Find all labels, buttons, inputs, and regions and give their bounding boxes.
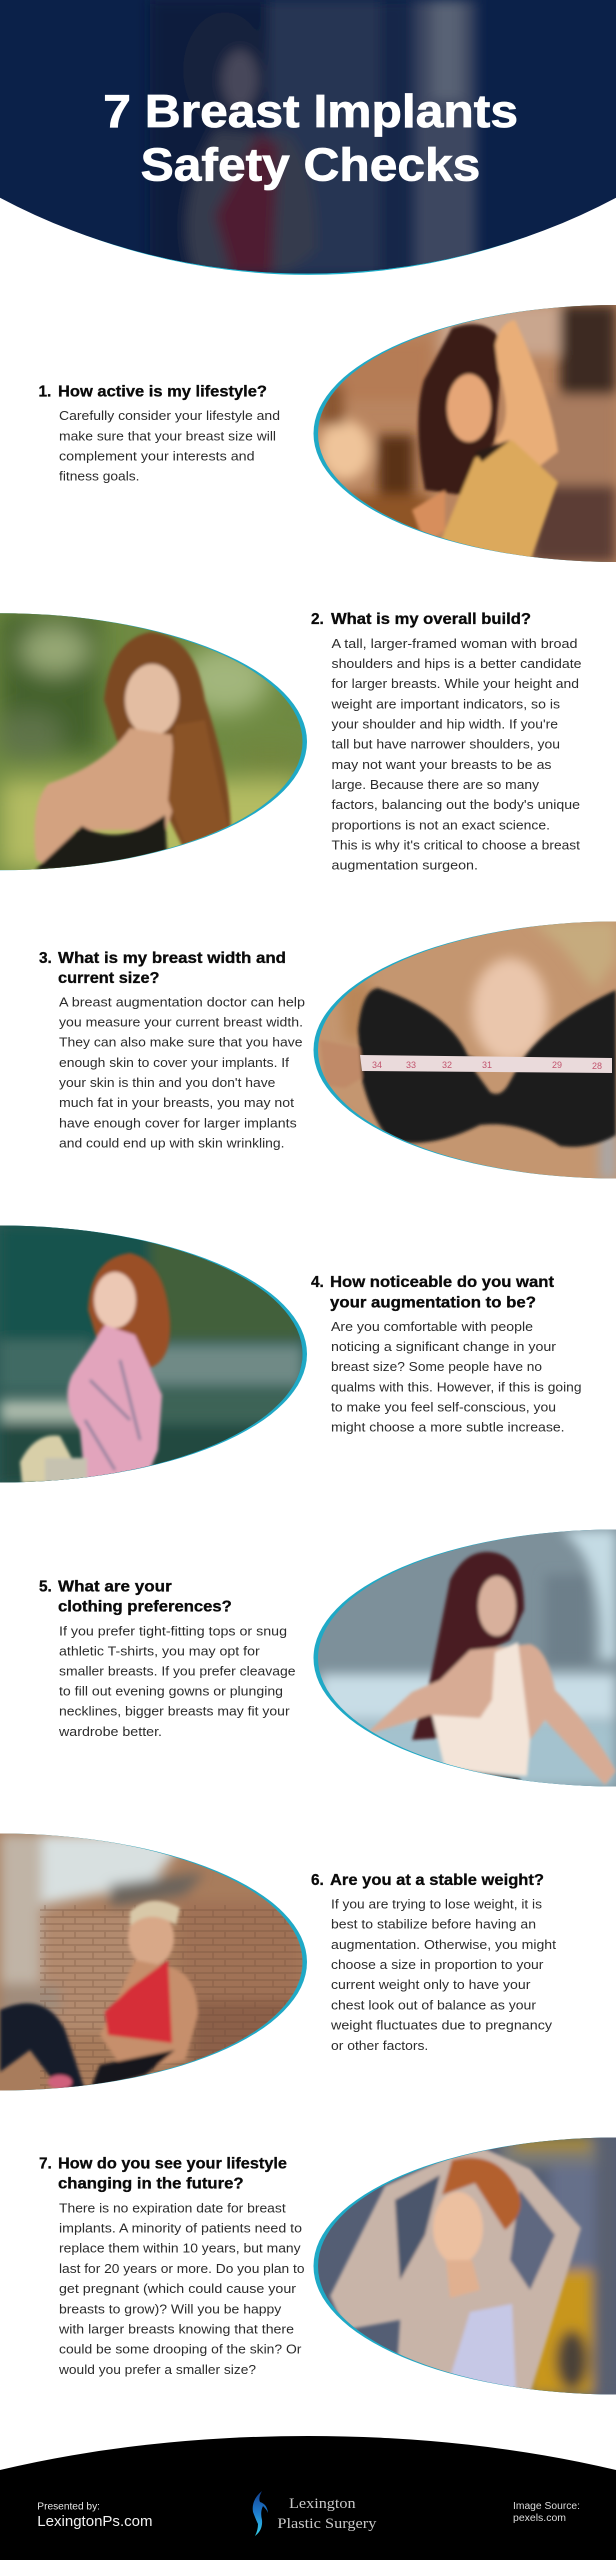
text: lifestyle changing: could be some drooping of the skin? Or [59,2342,302,2357]
teal header edge [0,0,616,275]
photo: woman against a brick wall [0,1833,307,2091]
text: lifestyle changing: would you prefer a smaller size? [58,2362,256,2377]
text: lifestyle changing [39,2156,304,2377]
text: breast width: much fat in your breasts, you may not [59,1095,294,1110]
text: overall build: factors, balancing out the body's unique [332,797,580,812]
section 6 [0,1833,556,2091]
text: stable weight: 6. [311,1872,324,1889]
title: 7 Breast Implants [103,85,518,137]
text: clothing preferences: What are your [58,1578,172,1596]
text: overall build: tall but have narrower shoulders, you [332,737,560,752]
text: lifestyle changing: changing in the future? [58,2176,244,2193]
text: overall build: large. Because there are so many [332,777,539,792]
measuring tape: 32 [442,1060,452,1070]
text: how active [38,384,280,484]
section 4 [0,1225,582,1483]
text: overall build: for larger breasts. While your height and [332,676,579,691]
text: breast width: They can also make sure that you have [59,1035,302,1050]
text: stable weight: augmentation. Otherwise, you might [331,1937,556,1952]
text: how noticeable: your augmentation to be? [330,1295,536,1312]
text: how noticeable [311,1274,582,1434]
text: overall build: proportions is not an exact science. [332,817,550,832]
text: overall build: may not want your breasts to be as [332,757,552,772]
text: overall build: A tall, larger-framed woman with broad [332,636,578,651]
photo: woman in fringe jacket [314,2137,616,2395]
presented by [37,2501,152,2530]
text: stable weight: If you are trying to lose weight, it is [331,1896,542,1911]
image source: Image Source: [513,2501,580,2512]
text: how noticeable: breast size? Some people have no [331,1359,542,1374]
icon: blue flame [253,2491,268,2536]
text: stable weight: best to stabilize before having an [331,1917,536,1932]
text: breast width: A breast augmentation doctor can help [59,994,305,1009]
text: lifestyle changing: 7. [39,2156,52,2172]
text: clothing preferences: necklines, bigger breasts may fit your [59,1704,290,1719]
logo: Lexington Plastic Surgery [253,2491,377,2536]
text: stable weight: Are you at a stable weight? [330,1872,544,1889]
text: breast width: your skin is thin and you don't have [59,1075,275,1090]
text: clothing preferences: clothing preferences? [58,1599,232,1616]
text: stable weight: current weight only to have your [331,1977,531,1992]
image source: pexels.com [513,2513,566,2524]
text: clothing preferences: smaller breasts. If you prefer cleavage [59,1664,296,1678]
section 3 [39,921,616,1180]
text: lifestyle changing: last for 20 years or more. Do you plan to [59,2261,304,2276]
photo: woman with raised arm [314,305,616,562]
text: overall build: This is why it's critical to choose a breast [332,838,580,852]
measuring tape: 28 [592,1061,602,1071]
measuring tape: 31 [482,1060,492,1070]
text: how active: make sure that your breast size will [59,428,276,443]
text: breast width: you measure your current breast width. [59,1015,303,1030]
text: how active: 1. [38,384,51,400]
measuring tape [360,1055,612,1073]
text: lifestyle changing: implants. A minority of patients need to [59,2220,302,2236]
text: breast width: have enough cover for larger implants [59,1115,297,1130]
text: lifestyle changing: get pregnant (which could cause your [59,2281,297,2296]
text: overall build: What is my overall build? [331,611,531,628]
text: breast width: enough skin to cover your implants. If [59,1055,289,1070]
text: how noticeable: 4. [311,1274,324,1291]
text: lifestyle changing: replace them within 10 years, but many [59,2241,301,2256]
text: stable weight: or other factors. [331,2038,428,2053]
header banner [0,0,616,275]
logo: Lexington Plastic Surgery: Plastic Surgery [277,2516,377,2532]
text: stable weight [311,1872,556,2053]
text: stable weight: chest look out of balance as your [331,1997,537,2012]
section 1 [38,305,616,562]
title [103,85,518,191]
text: breast width: and could end up with skin wrinkling. [59,1136,284,1151]
text: lifestyle changing: There is no expiration date for breast [59,2200,286,2215]
header photo: woman by a window [0,0,616,275]
measuring tape: 29 [552,1060,562,1070]
text: lifestyle changing: with larger breasts knowing that there [58,2322,294,2336]
text: clothing preferences: 5. [39,1578,52,1596]
text: how active: How active is my lifestyle? [58,384,267,400]
image source [513,2501,580,2524]
text: lifestyle changing: breasts to grow)? Will you be happy [59,2301,282,2316]
text: clothing preferences: wardrobe better. [58,1724,162,1739]
text: clothing preferences: If you prefer tight-fitting tops or snug [59,1623,287,1638]
text: how active: fitness goals. [59,469,140,484]
text: lifestyle changing: How do you see your lifestyle [58,2156,287,2172]
text: overall build: augmentation surgeon. [332,858,478,873]
text: breast width: 3. [39,950,52,967]
text: overall build: your shoulder and hip width. If you're [332,716,558,732]
presented by: LexingtonPs.com [37,2513,152,2530]
text: overall build: 2. [311,611,324,628]
text: overall build: weight are important indicators, so is [330,696,560,711]
title: Safety Checks [141,139,480,191]
text: overall build [311,611,582,873]
section 5 [39,1529,616,1787]
section 7 [39,2137,616,2395]
text: how active: complement your interests and [59,448,255,464]
text: overall build: shoulders and hips is a better candidate [332,656,582,671]
text: how noticeable: qualms with this. However, if this is going [331,1379,582,1394]
text: how noticeable: Are you comfortable with people [331,1319,533,1334]
text: breast width [39,950,305,1151]
photo: bra and measuring tape [314,921,616,1180]
text: how noticeable: to make you feel self-conscious, you [331,1399,556,1414]
text: clothing preferences: to fill out evening gowns or plunging [59,1684,283,1699]
text: how active: Carefully consider your lifestyle and [59,408,280,423]
footer [0,2436,616,2560]
photo: woman in cream top [314,1529,616,1787]
text: how noticeable: noticing a significant change in your [331,1339,557,1354]
text: how noticeable: How noticeable do you want [330,1274,554,1291]
photo: woman in pink dress by a lake [0,1225,307,1483]
photo: woman in a park [0,613,307,870]
text: how noticeable: might choose a more subtle increase. [331,1420,565,1434]
presented by: Presented by: [37,2501,100,2512]
text: breast width: What is my breast width and [58,950,286,967]
logo: Lexington Plastic Surgery: Lexington [289,2496,356,2512]
measuring tape: 33 [406,1060,416,1070]
text: clothing preferences: athletic T-shirts, you may opt for [59,1643,260,1658]
measuring tape: 34 [372,1060,382,1070]
section 2 [0,611,582,873]
text: stable weight: weight fluctuates due to pregnancy [330,2018,552,2033]
text: stable weight: choose a size in proportion to your [331,1957,544,1972]
text: clothing preferences [39,1578,296,1739]
text: breast width: current size? [58,970,160,987]
